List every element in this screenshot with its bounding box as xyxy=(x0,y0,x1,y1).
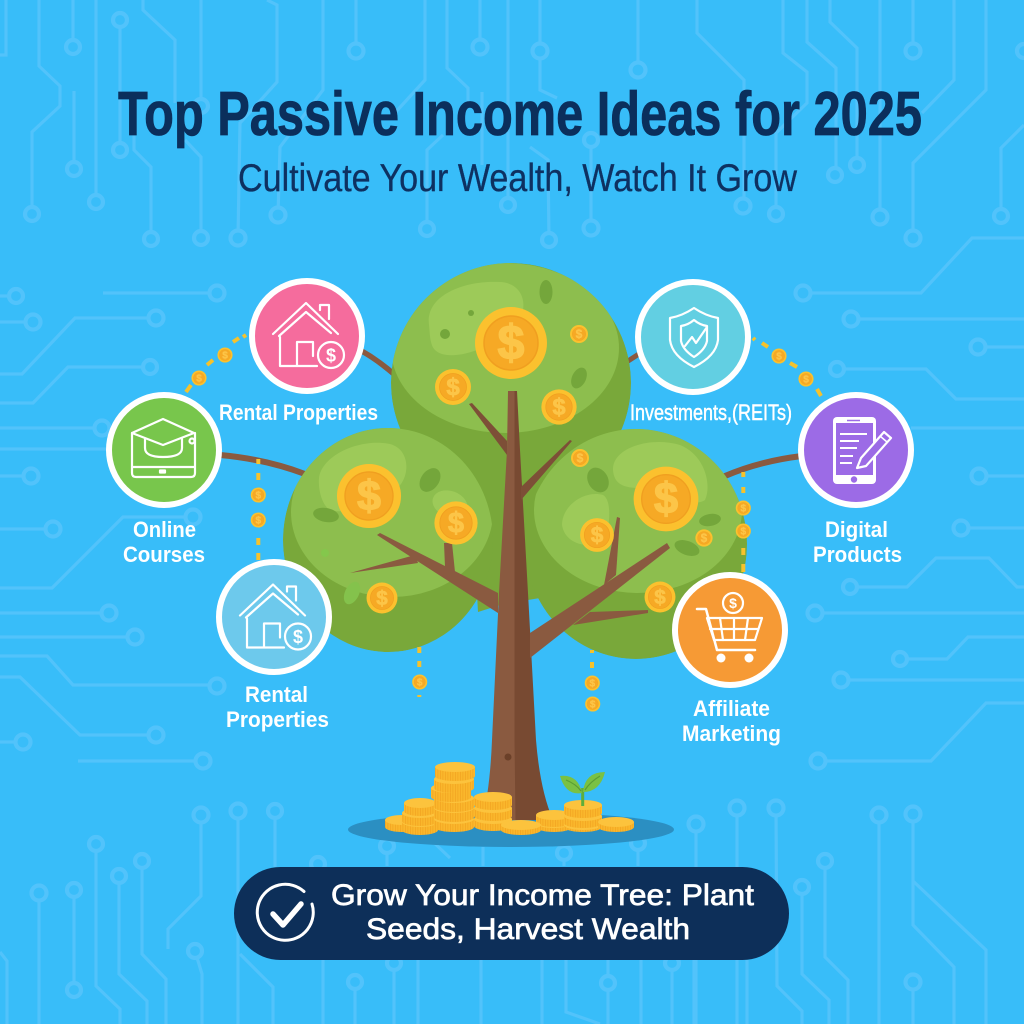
icon: rental properties pink xyxy=(252,281,362,391)
bottom callout banner: Seeds, Harvest Wealth xyxy=(366,913,690,946)
coin: large right xyxy=(634,467,698,531)
small link coins: $ xyxy=(776,351,782,362)
coin: large left xyxy=(337,464,401,528)
label: digital products: Products xyxy=(813,542,902,567)
bottom callout banner: Grow Your Income Tree: Plant xyxy=(331,879,755,912)
coin: tree top right xyxy=(541,389,577,425)
tree canopy: right xyxy=(525,427,747,659)
icon: digital products purple xyxy=(801,395,911,505)
tree shadow ground xyxy=(348,812,674,847)
icon: rental properties pink: $ xyxy=(326,346,336,366)
icon: check in circle xyxy=(257,884,313,940)
coin: right low: $ xyxy=(654,586,666,609)
label: investments: Investments,(REITs) xyxy=(630,400,792,425)
bottom callout banner xyxy=(234,867,789,960)
coin: right small xyxy=(695,529,713,547)
icon: rental properties light blue xyxy=(219,562,329,672)
small link coins: $ xyxy=(222,350,228,361)
coin: left low xyxy=(367,583,397,613)
coin: center small xyxy=(571,449,589,467)
coin: tree top small xyxy=(570,325,588,343)
label: rental properties top: Rental Properties xyxy=(219,400,378,425)
coin: large left: $ xyxy=(357,472,381,520)
small link coins: $ xyxy=(255,490,261,501)
small link coins: $ xyxy=(255,515,261,526)
icon: rental properties light blue: $ xyxy=(293,627,303,647)
label: online courses: Online xyxy=(133,517,196,542)
small link coins xyxy=(191,347,814,712)
coin: large top xyxy=(475,307,547,379)
coin: tree top right: $ xyxy=(552,394,566,420)
coin: left medium xyxy=(434,501,478,545)
coin: tree top small: $ xyxy=(576,327,583,341)
icon: affiliate marketing orange xyxy=(675,575,785,685)
small link coins: $ xyxy=(803,374,809,385)
label: rental properties lower: Rental xyxy=(245,682,308,707)
subtitle: Cultivate Your Wealth, Watch It Grow xyxy=(238,157,798,200)
label: online courses: Courses xyxy=(123,542,205,567)
branch connectors to icons xyxy=(220,350,802,476)
small link coins: $ xyxy=(196,373,202,384)
tree trunk and branches xyxy=(350,391,670,820)
label: digital products: Digital xyxy=(825,517,888,542)
coin: left medium: $ xyxy=(448,508,464,540)
coin: right medium: $ xyxy=(591,523,604,548)
small link coins: $ xyxy=(417,677,423,688)
tree canopy: left xyxy=(283,427,493,652)
coin: right medium xyxy=(580,518,614,552)
coin: large top: $ xyxy=(498,317,525,370)
coin: large right: $ xyxy=(654,475,678,523)
icon: investments shield teal xyxy=(638,282,748,392)
canopy gap fill behind trunk xyxy=(470,470,560,612)
tree canopy: top xyxy=(391,263,631,470)
coin: tree top left: $ xyxy=(446,374,460,401)
coin: center small: $ xyxy=(577,451,584,465)
icon: affiliate marketing orange: $ xyxy=(729,595,737,611)
sprout xyxy=(560,772,605,806)
label: affiliate marketing: Marketing xyxy=(682,721,781,746)
label: affiliate marketing: Affiliate xyxy=(693,696,770,721)
label: rental properties lower: Properties xyxy=(226,707,329,732)
small link coins: $ xyxy=(740,526,746,537)
small link coins: $ xyxy=(740,503,746,514)
small link coins: $ xyxy=(589,678,595,689)
small link coins: $ xyxy=(590,699,596,710)
coin: left low: $ xyxy=(376,587,388,610)
coin stacks at base of tree xyxy=(385,762,634,835)
dashed coin link lines xyxy=(186,335,821,697)
coin: right small: $ xyxy=(701,533,708,545)
coin: right low xyxy=(645,582,675,612)
icon: online courses green xyxy=(109,395,219,505)
coin: tree top left xyxy=(435,369,471,405)
